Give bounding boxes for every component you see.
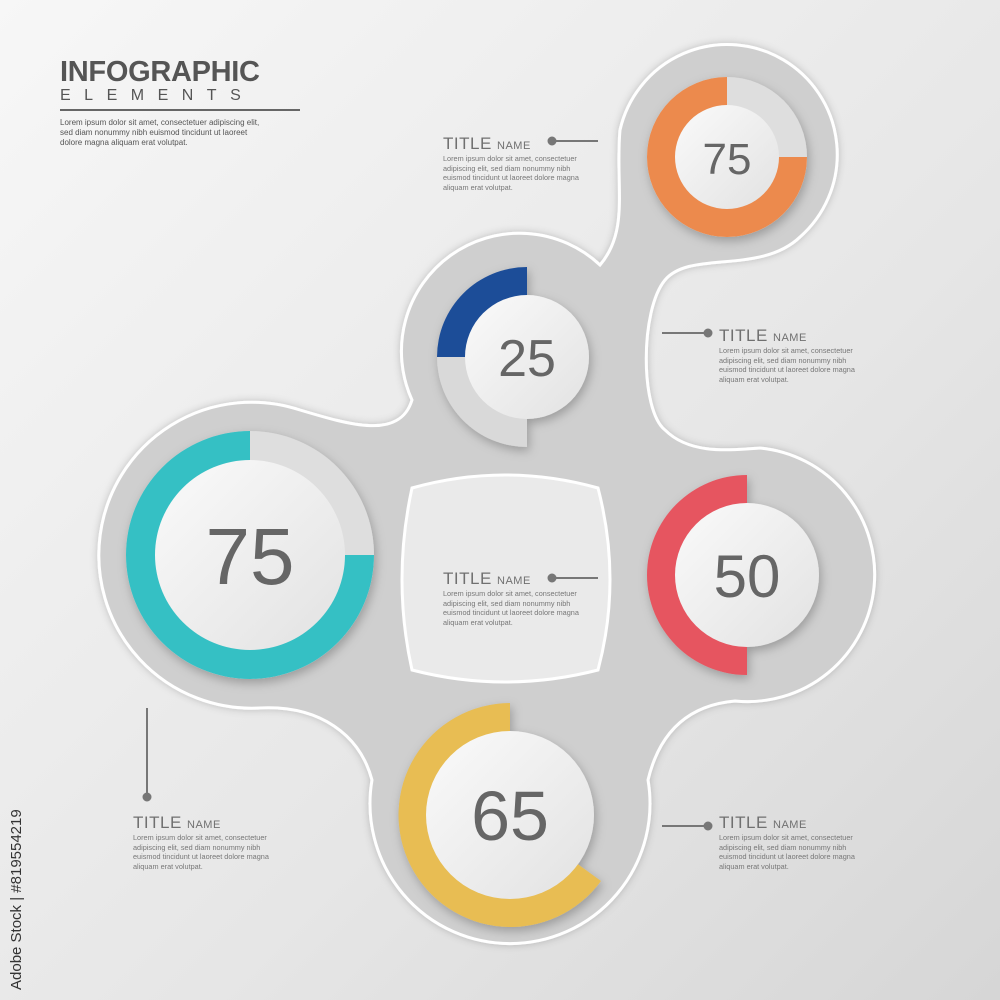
text block 3: TITLE NAME	[443, 569, 531, 588]
text block 4	[133, 813, 269, 871]
ring: blue 25: 25	[498, 330, 556, 388]
ring: blue 25	[437, 267, 589, 447]
text block 3: Lorem ipsum dolor sit amet, consectetuer adipiscing elit, sed diam nonummy nibh euismod tincidunt ut laoreet dolore magna aliquam erat volutpat.	[443, 589, 579, 627]
text block 2	[719, 326, 855, 384]
ring: yellow 65: 65	[471, 777, 549, 855]
text block 1: TITLE NAME	[443, 134, 531, 153]
title: ELEMENTS	[60, 87, 254, 104]
ring: red 50	[647, 475, 819, 675]
title	[60, 56, 300, 147]
blob shape	[99, 45, 875, 944]
connectors	[144, 138, 712, 830]
text block 5: Lorem ipsum dolor sit amet, consectetuer adipiscing elit, sed diam nonummy nibh euismod tincidunt ut laoreet dolore magna aliquam erat volutpat.	[719, 833, 855, 871]
island	[402, 475, 610, 682]
text block 5: TITLE NAME	[719, 813, 807, 832]
text block 1	[443, 134, 579, 192]
ring: orange 75: 75	[703, 135, 751, 184]
ring: teal 75	[126, 431, 374, 679]
text block 5	[719, 813, 855, 871]
title: INFOGRAPHIC	[60, 56, 260, 88]
ring: yellow 65	[399, 703, 601, 927]
text block 1: Lorem ipsum dolor sit amet, consectetuer adipiscing elit, sed diam nonummy nibh euismod tincidunt ut laoreet dolore magna aliquam erat volutpat.	[443, 154, 579, 192]
text block 4: Lorem ipsum dolor sit amet, consectetuer adipiscing elit, sed diam nonummy nibh euismod tincidunt ut laoreet dolore magna aliquam erat volutpat.	[133, 833, 269, 871]
ring: teal 75: 75	[206, 512, 294, 601]
title: Lorem ipsum dolor sit amet, consectetuer adipiscing elit, sed diam nonummy nibh euismod tincidunt ut laoreet dolore magna aliquam erat volutpat.	[60, 118, 259, 147]
text block 3	[443, 569, 579, 627]
ring: red 50: 50	[714, 543, 780, 610]
ring: orange 75	[647, 77, 807, 237]
text block 4: TITLE NAME	[133, 813, 221, 832]
stock id: Adobe Stock | #819554219	[8, 809, 25, 990]
text block 2: Lorem ipsum dolor sit amet, consectetuer adipiscing elit, sed diam nonummy nibh euismod tincidunt ut laoreet dolore magna aliquam erat volutpat.	[719, 346, 855, 384]
text block 2: TITLE NAME	[719, 326, 807, 345]
